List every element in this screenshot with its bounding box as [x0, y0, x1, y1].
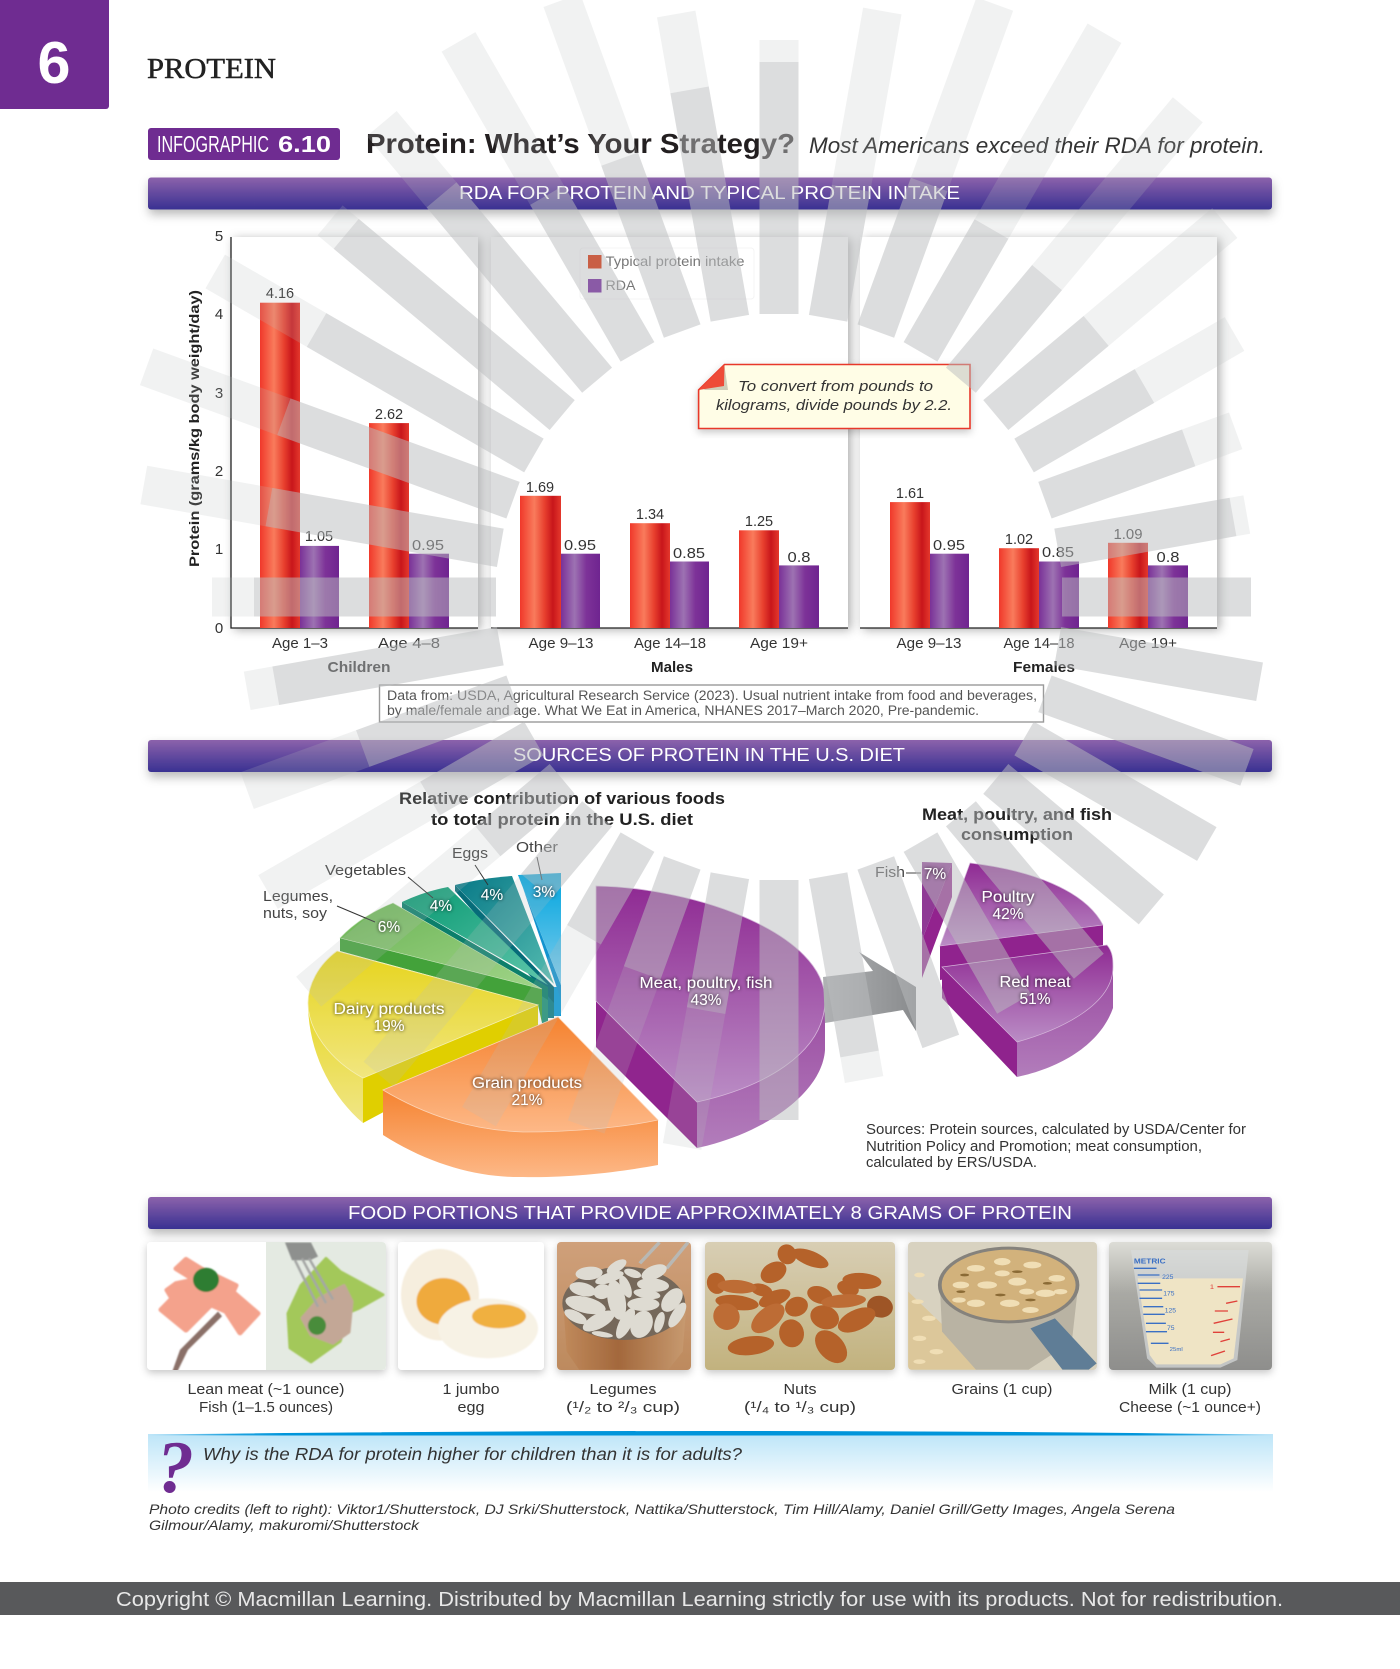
pie percentages: 43% [690, 992, 722, 1009]
photo credits [149, 1501, 1175, 1533]
callout: pounds to kilograms: To convert from pounds to [738, 378, 933, 395]
bars: males: 1.34 [636, 507, 664, 523]
section header: sources: SOURCES OF PROTEIN IN THE U.S. DIET [513, 745, 905, 765]
subtitle: Most Americans exceed their RDA for protein. [809, 133, 1265, 158]
slice: eggs [455, 876, 554, 1018]
photo: milk in measuring glass: 125 [1165, 1308, 1177, 1314]
photo: oats in measuring cup [908, 1242, 1097, 1370]
slice: red meat [942, 945, 1113, 1077]
group labels: Males [651, 659, 693, 676]
photo: milk in measuring glass: 75 [1167, 1325, 1175, 1332]
breakdown percentages: 51% [1019, 991, 1051, 1008]
callout: pounds to kilograms: kilograms, divide pounds by 2.2. [716, 397, 952, 414]
photo credits: Photo credits (left to right): Viktor1/Shutterstock, DJ Srki/Shutterstock, Nattika/Shutterstock, Tim Hill/Alamy, Daniel Grill/Getty Images, Angela Serena [149, 1501, 1175, 1517]
heading: meat, poultry, fish consumption: consumption [961, 825, 1073, 844]
age labels: Age 9–13 [896, 635, 962, 652]
section header: sources [148, 740, 1272, 772]
infographic badge: 6.10 [278, 131, 331, 157]
photo captions: Grains (1 cup) [952, 1381, 1052, 1398]
pie percentages: 3% [533, 884, 555, 901]
pie percentages: 6% [378, 919, 400, 936]
legend swatches [588, 255, 602, 292]
y axis ticks [215, 228, 223, 637]
bars: females: 1.02 [1005, 532, 1033, 548]
pie chart: food sources of protein [263, 839, 825, 1177]
group labels: Females [1013, 659, 1075, 676]
bars: females: 1.09 [1114, 527, 1142, 543]
pie percentages: 4% [430, 898, 452, 915]
photo captions: Cheese (~1 ounce+) [1119, 1399, 1261, 1416]
photo captions [188, 1381, 1261, 1416]
y axis ticks: 5 [215, 228, 223, 245]
bars: males [520, 480, 819, 628]
slice: meat, poultry, fish [596, 886, 825, 1148]
pie percentages: 21% [511, 1092, 543, 1109]
bars: males: 0.95 [564, 538, 596, 554]
heading: relative contribution [399, 789, 725, 829]
y axis title: Protein (grams/kg body weight/day) [186, 290, 202, 567]
fish label [875, 864, 921, 881]
pie chart: meat, poultry, fish breakdown [875, 862, 1113, 1077]
heading: relative contribution: to total protein in the U.S. diet [431, 810, 693, 829]
copyright footer [0, 1582, 1400, 1615]
breakdown percentages: 7% [924, 866, 946, 883]
pie percentages: Grain products [472, 1075, 582, 1092]
sources note: calculated by ERS/USDA. [866, 1154, 1037, 1171]
chapter title: PROTEIN [147, 53, 276, 85]
section header: food portions [148, 1197, 1272, 1229]
question band [148, 1427, 1273, 1509]
data source box [380, 685, 1044, 722]
y axis ticks: 4 [215, 306, 223, 323]
bars: females: 1.61 [896, 486, 924, 502]
age labels [272, 635, 1177, 652]
legend: RDA [606, 277, 636, 293]
pie percentages: 4% [481, 887, 503, 904]
data source box: by male/female and age. What We Eat in America, NHANES 2017–March 2020, Pre-pandemic. [387, 703, 979, 718]
age labels: Age 19+ [750, 635, 808, 652]
group labels [328, 659, 1075, 676]
copyright footer: Copyright © Macmillan Learning. Distributed by Macmillan Learning strictly for use with its products. Not for redistribution. [116, 1589, 1283, 1611]
bars: females: 0.85 [1042, 545, 1074, 561]
bars: females: 0.95 [933, 538, 965, 554]
fish label: Fish [875, 864, 905, 881]
slice: fish [922, 862, 952, 978]
age labels: Age 1–3 [272, 635, 328, 652]
breakdown percentages [924, 866, 1071, 1008]
photo captions: Milk (1 cup) [1148, 1381, 1232, 1398]
photo captions: Nuts [784, 1381, 816, 1398]
arrow to breakdown pie [823, 952, 916, 1031]
legend [580, 248, 754, 299]
icon: question mark: ? [157, 1427, 194, 1509]
bars: children: 0.95 [412, 538, 444, 554]
chart panels [231, 237, 1217, 628]
pie labels: Eggs [452, 845, 488, 862]
age labels: Age 14–18 [634, 635, 706, 652]
pie percentages [334, 884, 772, 1109]
section header: RDA: RDA FOR PROTEIN AND TYPICAL PROTEIN INTAKE [459, 183, 960, 203]
photo captions: (¹/₄ to ¹/₃ cup) [744, 1399, 856, 1416]
heading: meat, poultry, fish consumption [922, 805, 1112, 844]
bars: males: 1.69 [526, 480, 554, 496]
photo credits: Gilmour/Alamy, makuromi/Shutterstock [149, 1517, 420, 1533]
infographic badge: INFOGRAPHIC [157, 131, 269, 157]
data source box: Data from: USDA, Agricultural Research Service (2023). Usual nutrient intake from food and beverages, [387, 688, 1037, 703]
photo captions: Fish (1–1.5 ounces) [199, 1399, 333, 1416]
pie percentages: 19% [373, 1018, 405, 1035]
breakdown percentages: Red meat [1000, 974, 1071, 991]
photo captions: 1 jumbo [442, 1381, 500, 1398]
bars: males: 0.85 [673, 546, 705, 562]
y axis ticks: 3 [215, 385, 223, 402]
pie labels: Other [516, 839, 558, 856]
photo: milk in measuring glass: 175 [1163, 1291, 1175, 1298]
photo: milk in measuring glass: 25ml [1170, 1347, 1183, 1353]
question text: Why is the RDA for protein higher for children than it is for adults? [203, 1444, 742, 1464]
photo: milk in measuring glass: 225 [1162, 1274, 1174, 1281]
age labels: Age 9–13 [528, 635, 594, 652]
main title: Protein: What’s Your Strategy? [366, 128, 795, 159]
breakdown percentages: 42% [992, 906, 1024, 923]
bars: children [260, 286, 449, 628]
age labels: Age 4–8 [378, 635, 440, 652]
pie labels: Legumes, [263, 888, 333, 905]
age labels: Age 19+ [1119, 635, 1177, 652]
pie labels [263, 839, 558, 922]
bars: males: 1.25 [745, 514, 773, 530]
pie labels: nuts, soy [263, 905, 328, 922]
bars: males: 0.8 [788, 550, 810, 566]
slice: dairy [308, 951, 538, 1123]
bars: children: 4.16 [266, 286, 294, 302]
pie labels: Vegetables [325, 862, 406, 879]
photo: milk in measuring glass: 1 [1210, 1283, 1214, 1291]
breakdown percentages: Poultry [982, 889, 1035, 906]
sources note: Sources: Protein sources, calculated by USDA/Center for [866, 1121, 1246, 1138]
group labels: Children [328, 659, 390, 676]
legend: Typical protein intake [606, 253, 745, 269]
photo: boiled egg [398, 1242, 544, 1370]
slice: poultry [940, 863, 1103, 980]
photo: ham and tuna [147, 1242, 386, 1372]
photo captions: Legumes [590, 1381, 656, 1398]
bar chart: protein intake vs RDA [186, 228, 1217, 676]
photo captions: Lean meat (~1 ounce) [188, 1381, 344, 1398]
chapter number tab [0, 0, 109, 109]
pie percentages: Dairy products [334, 1001, 445, 1018]
photo captions: (¹/₂ to ²/₃ cup) [566, 1399, 680, 1416]
background sunburst rays [140, 0, 1263, 1150]
pie percentages: Meat, poultry, fish [640, 975, 772, 992]
photo captions: egg [458, 1399, 484, 1416]
y axis ticks: 0 [215, 620, 223, 637]
y axis ticks: 2 [215, 463, 223, 480]
bars: females [890, 486, 1188, 628]
heading: meat, poultry, fish consumption: Meat, poultry, and fish [922, 805, 1112, 824]
bars: children: 2.62 [375, 407, 403, 423]
slice: other [518, 873, 561, 1016]
photo: milk in measuring glass [1109, 1242, 1272, 1370]
slice: legumes [340, 903, 542, 1023]
heading: relative contribution: Relative contribution of various foods [399, 789, 725, 808]
slice: vegetables [402, 887, 548, 1023]
infographic badge [148, 128, 340, 160]
photo: almonds [705, 1242, 897, 1370]
sources note [866, 1121, 1246, 1171]
section header: food portions: FOOD PORTIONS THAT PROVIDE APPROXIMATELY 8 GRAMS OF PROTEIN [348, 1203, 1072, 1223]
sources note: Nutrition Policy and Promotion; meat consumption, [866, 1138, 1202, 1155]
callout: pounds to kilograms [699, 364, 970, 428]
age labels: Age 14–18 [1004, 635, 1074, 652]
section header: RDA [148, 178, 1272, 210]
bars: children: 1.05 [305, 529, 333, 545]
bars: females: 0.8 [1156, 550, 1180, 566]
chapter number tab: 6 [38, 30, 70, 96]
slice: grain [383, 1017, 658, 1177]
photo: beans in cup [557, 1242, 691, 1370]
y axis ticks: 1 [215, 541, 223, 558]
photo: milk in measuring glass: METRIC [1134, 1257, 1166, 1265]
